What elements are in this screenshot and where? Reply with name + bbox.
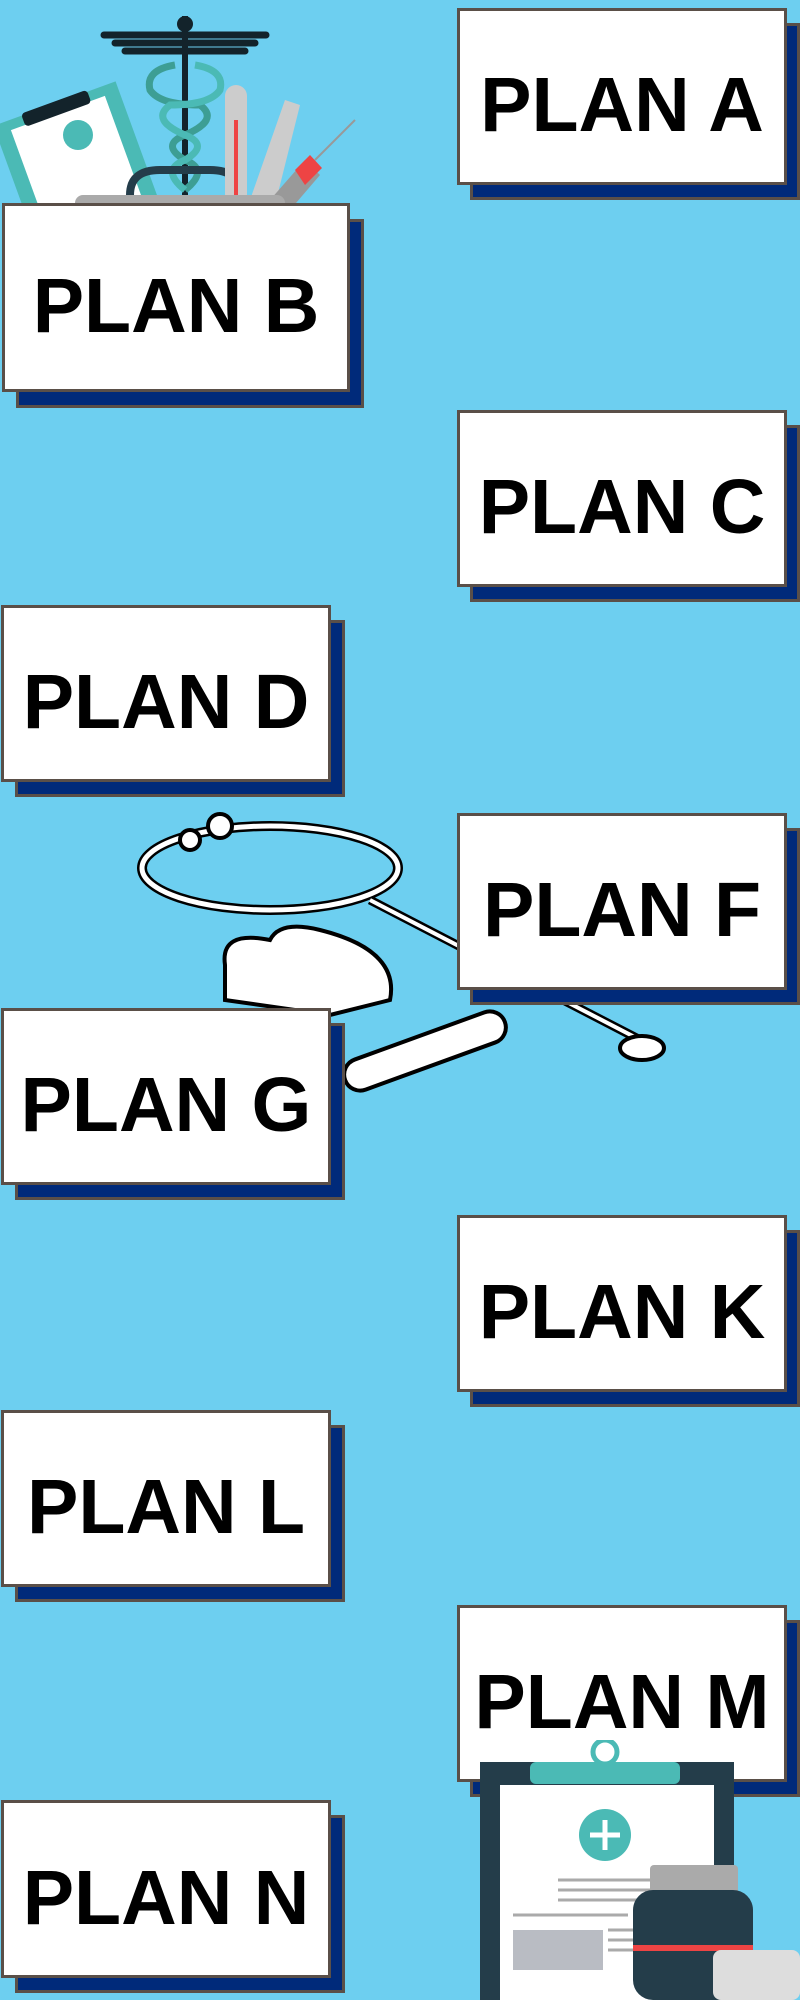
card: PLAN M — [457, 1605, 800, 1797]
card: PLAN C — [457, 410, 800, 602]
card: PLAN L: PLAN L — [27, 1464, 305, 1550]
card: PLAN L — [1, 1410, 345, 1602]
illustration: clipboard and bottle — [480, 1800, 800, 2000]
card: PLAN F: PLAN F — [483, 867, 761, 953]
card: PLAN A: PLAN A — [480, 62, 764, 148]
card: PLAN M: PLAN M — [474, 1659, 770, 1745]
card: PLAN C: PLAN C — [479, 464, 765, 550]
card: PLAN D: PLAN D — [23, 659, 309, 745]
card: PLAN K — [457, 1215, 800, 1407]
illustration: medical kit — [0, 16, 356, 203]
card: PLAN B: PLAN B — [33, 263, 319, 349]
card: PLAN F — [457, 813, 800, 1005]
card: PLAN D — [1, 605, 345, 797]
card: PLAN G: PLAN G — [21, 1062, 311, 1148]
card: PLAN K: PLAN K — [479, 1269, 765, 1355]
card: PLAN G — [1, 1008, 345, 1200]
illustration: stethoscope — [137, 812, 666, 1093]
card: PLAN B — [2, 203, 364, 408]
card: PLAN N: PLAN N — [23, 1854, 309, 1940]
card: PLAN A — [457, 8, 800, 200]
card: PLAN N — [1, 1800, 345, 1993]
illustration: clipboard overlay — [480, 1740, 734, 1797]
